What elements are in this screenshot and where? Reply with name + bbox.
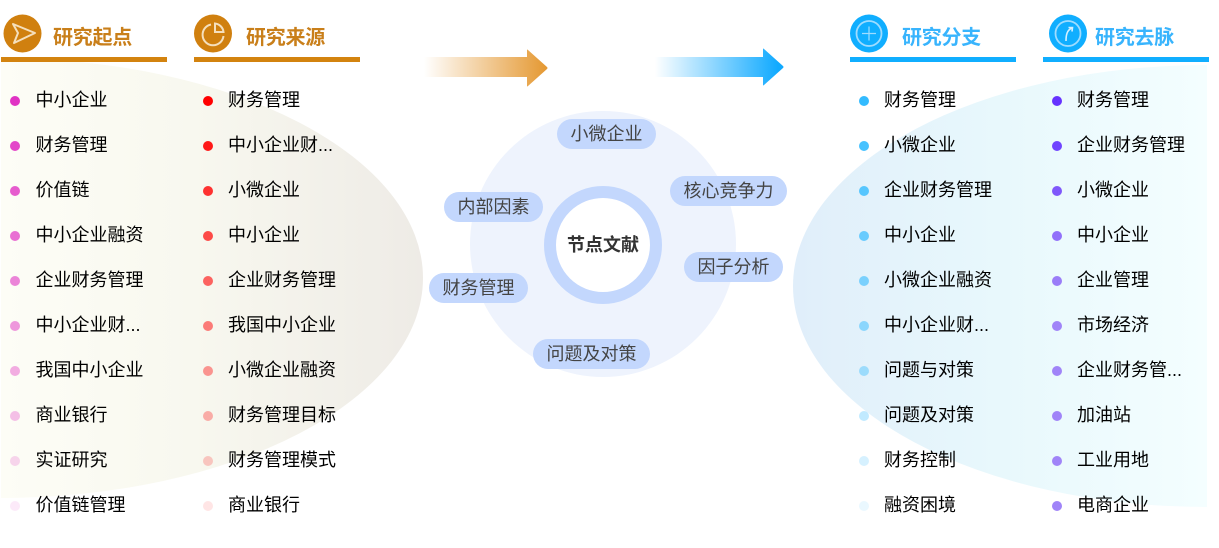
item: 企业财务管理 [36,270,144,290]
background ellipse: left warm [1,62,423,498]
item [1043,437,1209,482]
panel: node diagram [429,111,787,377]
item: 财务管理目标 [228,405,336,425]
item: 企业财务管理 [228,270,336,290]
heading: 研究分支 [850,14,1016,62]
item: 商业银行 [36,405,108,425]
pill: 小微企业 [557,119,656,149]
item [1043,392,1209,437]
item: 问题与对策 [884,360,974,380]
item: 中小企业 [228,225,300,245]
item: 中小企业财... [884,315,989,335]
item [1043,77,1209,122]
item: 企业管理 [1077,270,1149,290]
item: 我国中小企业 [36,360,144,380]
heading: 研究去脉 [1043,14,1209,62]
heading text: 研究分支 [902,27,981,49]
pill: 内部因素 [444,192,543,222]
item: 小微企业 [884,135,956,155]
item [850,437,1016,482]
pill: 因子分析 [684,252,783,282]
pill: 小微企业: 小微企业 [570,124,642,144]
arrow: blue [655,46,786,88]
item: 企业财务管理 [884,180,992,200]
item: 市场经济 [1077,315,1149,335]
heading text: 研究起点 [53,27,132,49]
item [10,180,90,200]
item [1043,257,1209,302]
pill: 内部因素: 内部因素 [458,197,530,217]
item [1043,122,1209,167]
list: 研究去脉 [1043,77,1209,527]
item: 中小企业财... [36,315,141,335]
item [1043,212,1209,257]
pill: 财务管理: 财务管理 [442,278,514,298]
item: 小微企业 [228,180,300,200]
item [1043,482,1209,527]
list: 研究分支 [859,90,992,515]
item: 中小企业 [1077,225,1149,245]
pill: 核心竞争力: 核心竞争力 [684,181,774,201]
item: 加油站 [1077,405,1131,425]
item: 中小企业 [884,225,956,245]
item: 小微企业 [1077,180,1149,200]
icon: turn arrow circle [1049,14,1087,52]
large background circle [470,111,736,377]
item: 价值链 [36,180,90,200]
list: 研究来源 [203,90,336,515]
item: 工业用地 [1077,450,1149,470]
pill: 问题及对策 [533,339,650,369]
item: 我国中小企业 [228,315,336,335]
item: 价值链管理 [36,495,126,515]
item: 融资困境 [884,495,956,515]
item: 企业财务管... [1077,360,1182,380]
heading text: 研究来源 [246,27,325,49]
item: 财务控制 [884,450,956,470]
heading text: 研究去脉 [1095,27,1174,49]
item: 财务管理 [36,135,108,155]
item: 财务管理 [1077,90,1149,110]
item: 财务管理模式 [228,450,336,470]
icon: paper plane [4,14,42,52]
item [1043,347,1209,392]
heading: 研究来源 [194,14,360,62]
pill: 问题及对策: 问题及对策 [546,344,636,364]
list: 研究起点 [10,90,144,515]
item [850,392,1016,437]
pill: 因子分析: 因子分析 [698,257,770,277]
icon: plus circle [850,14,888,52]
item: 中小企业财... [228,135,333,155]
item [1043,167,1209,212]
center node: 节点文献 [544,186,662,304]
item: 财务管理 [228,90,300,110]
item: 中小企业融资 [36,225,144,245]
item: 小微企业融资 [228,360,336,380]
arrow: orange [424,47,550,89]
icon: pie chart [194,14,232,52]
item: 商业银行 [228,495,300,515]
center node: 节点文献: 节点文献 [567,235,639,255]
item [850,482,1016,527]
item: 电商企业 [1077,495,1149,515]
background ellipse: right blue [793,65,1207,507]
item: 问题及对策 [884,405,974,425]
pill: 财务管理 [429,273,528,303]
item: 财务管理 [884,90,956,110]
pill: 核心竞争力 [670,176,787,206]
item [1043,302,1209,347]
heading: 研究起点 [1,14,167,62]
item: 小微企业融资 [884,270,992,290]
item: 企业财务管理 [1077,135,1185,155]
item: 实证研究 [36,450,108,470]
item: 中小企业 [36,90,108,110]
